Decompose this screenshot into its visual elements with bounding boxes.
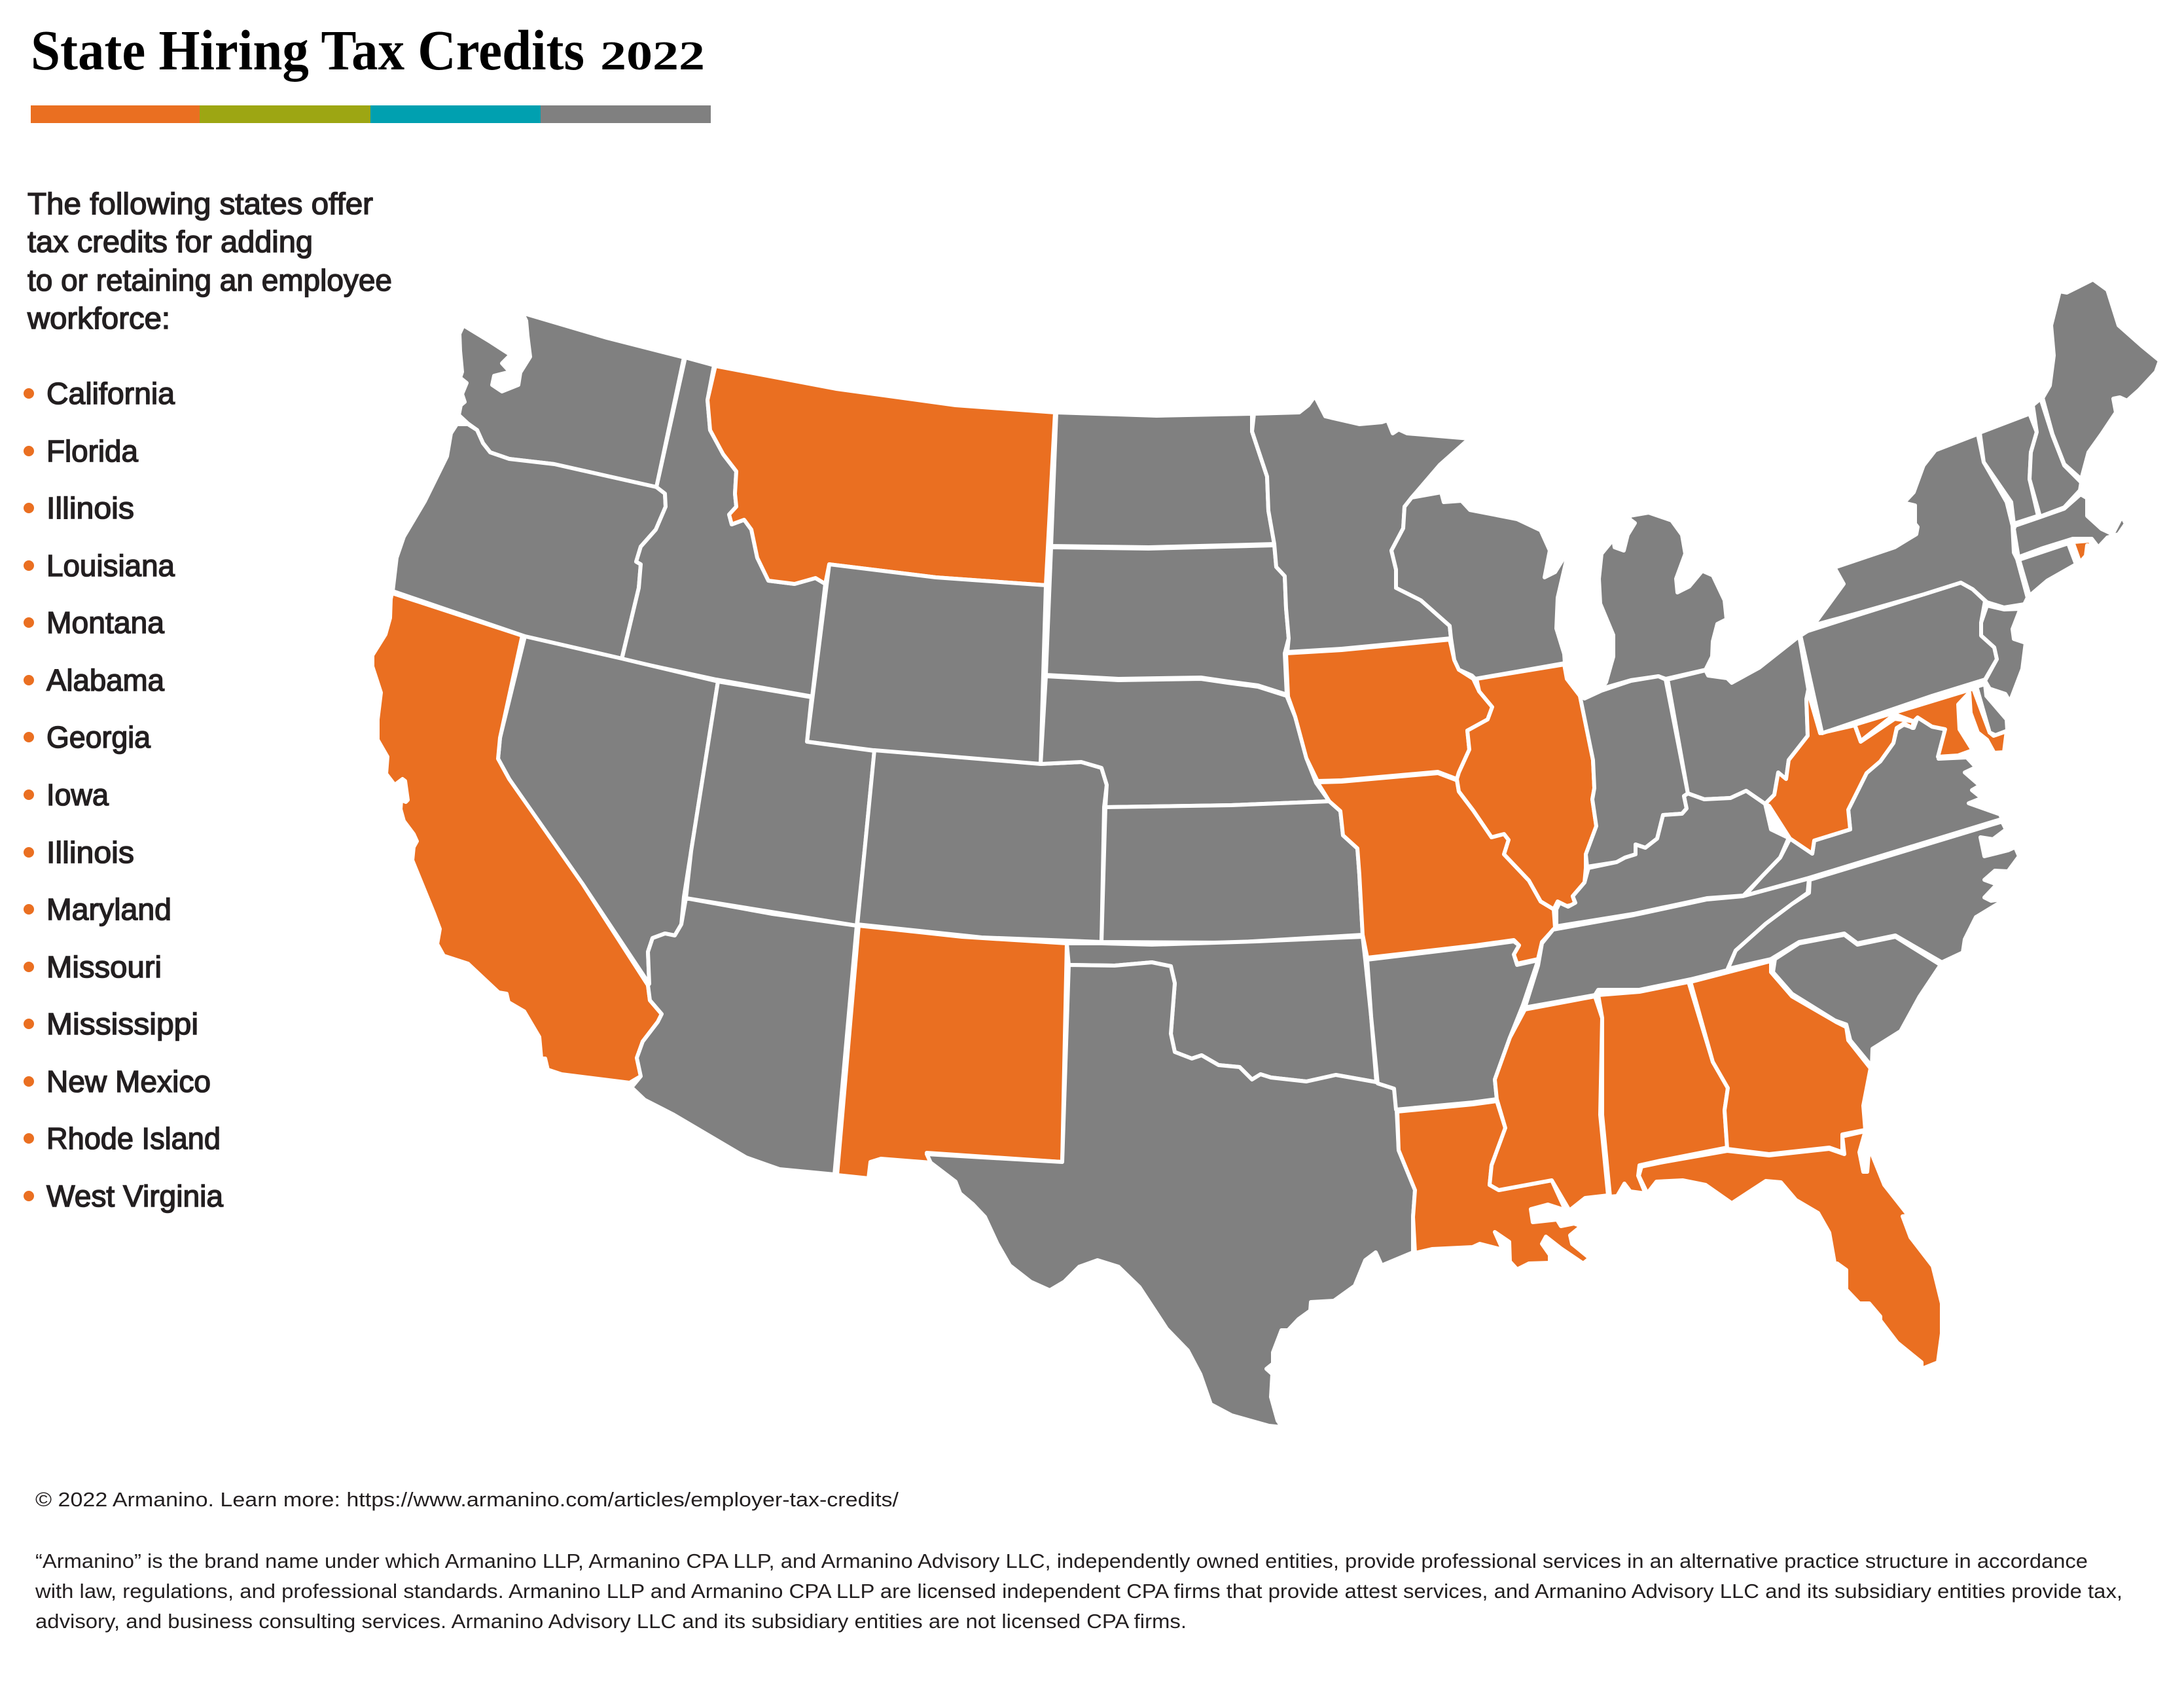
state: Wisconsin	[1391, 492, 1569, 679]
state: Georgia	[1691, 961, 1871, 1154]
state: Missouri	[1317, 773, 1555, 964]
state: Michigan	[1599, 513, 1727, 689]
colour bar	[31, 105, 711, 123]
state: Montana	[707, 366, 1055, 585]
state: Washington	[459, 313, 684, 487]
state list: Alabama	[46, 663, 164, 697]
state: Iowa	[1286, 640, 1492, 781]
state: Connecticut	[2019, 543, 2076, 596]
state: West Virginia	[1765, 693, 1914, 854]
state: Nevada	[498, 636, 718, 984]
footer: legal disclaimer: advisory, and business consulting services. Armanino Advisory LLC and its subsidiary entities are not licensed CPA firms.	[35, 1610, 1187, 1633]
state: Indiana	[1580, 676, 1688, 867]
state: New Jersey	[1981, 606, 2026, 702]
state: Arizona	[632, 898, 857, 1174]
state list: Rhode Island	[46, 1121, 221, 1155]
state: Texas	[927, 962, 1415, 1427]
state: Oklahoma	[1067, 937, 1376, 1082]
state: Ohio	[1668, 636, 1808, 804]
state: New Mexico	[837, 926, 1067, 1178]
state: Vermont	[1980, 414, 2038, 524]
state list: Montana	[46, 606, 164, 640]
state: North Carolina	[1728, 822, 2019, 969]
intro text: workforce:	[27, 301, 170, 335]
state: Virginia	[1745, 717, 2002, 896]
state list: West Virginia	[46, 1179, 223, 1213]
state: Colorado	[857, 750, 1107, 942]
intro text: The following states offer	[27, 187, 373, 221]
state: Delaware	[1977, 684, 2007, 735]
state list: Missouri	[46, 950, 162, 984]
state list: Illinois	[46, 491, 134, 525]
state list: New Mexico	[46, 1064, 211, 1098]
map of the United States	[372, 280, 2160, 1427]
state: Florida	[1639, 1131, 1942, 1369]
state: Tennessee	[1525, 879, 1809, 1007]
intro text: tax credits for adding	[27, 225, 313, 259]
state: California	[372, 593, 662, 1083]
state: Arkansas	[1367, 941, 1538, 1110]
state: Rhode Island	[2073, 541, 2093, 562]
state: Idaho	[622, 357, 825, 697]
state list: Illinois	[46, 835, 134, 869]
state: Mississippi	[1490, 996, 1608, 1210]
state: South Dakota	[1046, 545, 1289, 695]
state: Minnesota	[1252, 396, 1469, 652]
state: New Hampshire	[2030, 399, 2081, 517]
state: North Dakota	[1051, 412, 1274, 547]
state list: Mississippi	[46, 1007, 198, 1041]
state: Kentucky	[1556, 791, 1789, 926]
intro text: to or retaining an employee	[27, 263, 392, 297]
footer: copyright line: © 2022 Armanino. Learn more: https://www.armanino.com/articles/employer-tax-credits/	[35, 1488, 899, 1511]
title: State Hiring Tax Credits	[31, 18, 584, 82]
state: Wyoming	[807, 564, 1046, 764]
state: Illinois	[1457, 664, 1596, 909]
state list: California	[46, 376, 175, 410]
state list: Georgia	[46, 720, 151, 754]
state: New York	[1814, 434, 2028, 625]
state: Louisiana	[1397, 1101, 1590, 1269]
footer: legal disclaimer: “Armanino” is the brand name under which Armanino LLP, Armanino CPA LLP, and Armanino Advisory LLC, independently owned entities, provide professional services in an alternative practice structure in accordance	[35, 1550, 2088, 1572]
state: Pennsylvania	[1800, 583, 1997, 733]
state: Oregon	[393, 424, 666, 659]
intro text	[27, 187, 392, 335]
state: Kansas	[1101, 801, 1363, 943]
state: Nebraska	[1041, 676, 1329, 807]
state list: Louisiana	[46, 549, 175, 583]
state: Alabama	[1598, 982, 1728, 1197]
state list: Iowa	[46, 778, 109, 812]
footer: legal disclaimer: with law, regulations, and professional standards. Armanino LLP and Armanino CPA LLP are licensed independent CPA firms that provide attest services, and Armanino Advisory LLC and its subsidiary entities provide tax,	[35, 1580, 2122, 1603]
title: 2022	[600, 34, 705, 79]
state: Utah	[686, 681, 874, 926]
state list: Maryland	[46, 892, 171, 926]
state: Massachusetts	[2014, 494, 2126, 557]
state: Maryland	[1855, 689, 2007, 757]
state list: Florida	[46, 434, 138, 468]
state list	[24, 376, 223, 1213]
state: South Carolina	[1773, 935, 1941, 1066]
state: Maine	[2043, 280, 2160, 479]
footer: legal disclaimer	[35, 1550, 2122, 1633]
